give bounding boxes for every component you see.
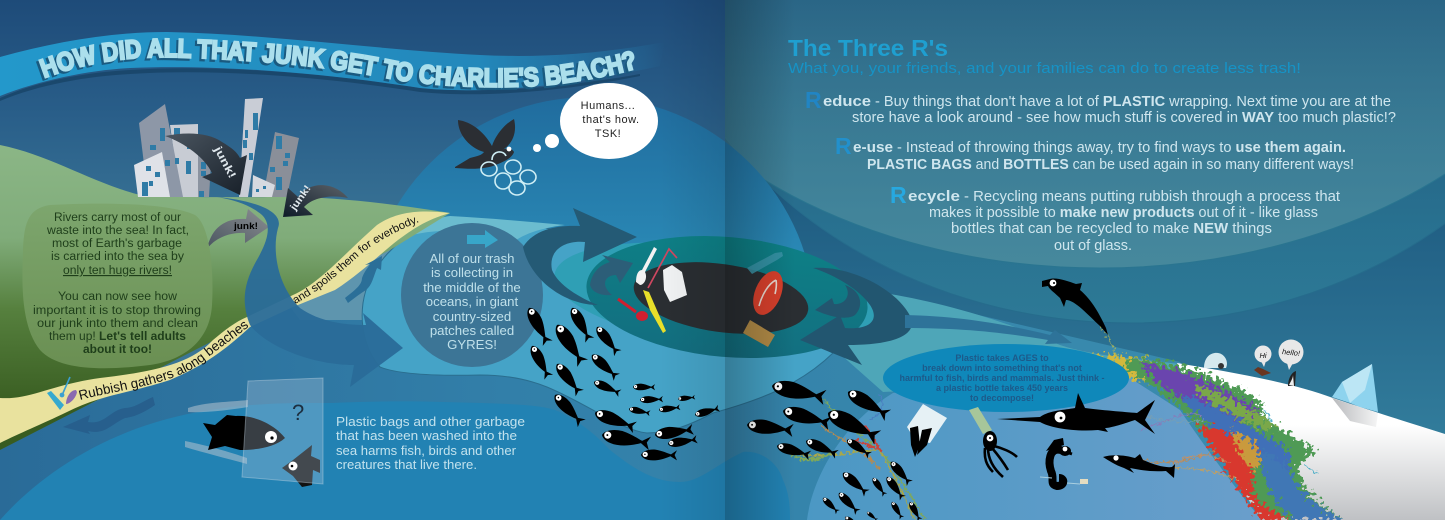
strands of net around the animals (1100, 325, 1318, 480)
text block: recycle: bottles that can be recycled to make NEW things (951, 221, 1272, 237)
trash: fork (636, 247, 657, 285)
title: HOW DID ALL THAT JUNK GET TO CHARLIE'S BEACH? (38, 38, 634, 88)
green hill (0, 145, 450, 450)
background: deep blue lagoon (0, 401, 790, 520)
trash: plastic jug (663, 265, 687, 302)
fish tangled in nets (746, 378, 925, 520)
text panel: rivers: only ten huge rivers! (63, 265, 172, 277)
background: grey-blue shallows under the beach (285, 232, 400, 320)
background: lower sea (0, 218, 1262, 520)
arrow: gyre inner left (590, 255, 633, 295)
text: plastic bags: sea harms fish, birds and other (336, 443, 517, 458)
text block: reduce: R (805, 87, 822, 113)
arrow: junk into the river: junk! (288, 183, 314, 214)
text panel: plastic takes ages: harmful to fish, birds and mammals. Just think - (899, 373, 1105, 383)
icon: rubbish on the beach (47, 377, 77, 410)
text panel: gyres: All of our trash (429, 251, 515, 266)
background: left page (0, 0, 725, 520)
text: plastic bags (336, 414, 525, 472)
squid in a cup (969, 407, 1017, 477)
text block: re-use (835, 133, 1354, 173)
background: teal current to the right of the gyre (830, 290, 1185, 392)
text panel: rivers: waste into the sea! In fact, (46, 225, 189, 237)
trash: bottle (747, 252, 783, 274)
text: plastic bags: creatures that live there. (336, 457, 477, 472)
text panel: plastic takes ages: to decompose! (970, 393, 1034, 403)
text panel: gyres: the middle of the (423, 280, 521, 295)
river and big current arrow (217, 197, 403, 387)
text block: recycle: out of glass. (1054, 238, 1132, 254)
text block: re-use: - Instead of throwing things away, try to find ways to use them again. (897, 140, 1346, 156)
trash: straw (648, 249, 677, 288)
arrow: junk from the land (207, 209, 269, 249)
text panel: rivers: is carried into the sea by (51, 251, 184, 263)
text: plastic bags: that has been washed into the (336, 428, 517, 443)
text panel: gyres: patches called (430, 323, 514, 338)
text panel: gyres (401, 223, 543, 367)
iceberg (1332, 364, 1378, 427)
text block: recycle (890, 182, 1340, 254)
text panel: rivers: Rivers carry most of our (54, 212, 181, 224)
text panel: plastic takes ages: break down into something that's not (922, 363, 1082, 373)
speech bubble: hi: Hi (1259, 351, 1267, 360)
bird tangled in rings (455, 119, 536, 195)
text panel: gyres: country-sized (433, 309, 511, 324)
text panel: rivers (22, 204, 212, 368)
text block: re-use: e-use (853, 139, 893, 156)
arrow: current to the arctic (905, 315, 1072, 344)
text panel: plastic takes ages: Plastic takes AGES to (955, 353, 1049, 363)
background: right page (725, 0, 1445, 520)
sandy beach (0, 212, 450, 443)
arrow: junk from the city (165, 134, 247, 195)
text block: re-use: PLASTIC BAGS and BOTTLES can be used again in so many different ways! (867, 157, 1354, 173)
text panel: gyres: is collecting in (431, 265, 513, 280)
arrow: junk from the land: junk! (233, 221, 258, 231)
background: large teal arcs behind the three R's (725, 0, 1445, 322)
title: HOW DID ALL THAT JUNK GET TO CHARLIE'S BEACH? (36, 40, 632, 90)
trash: flip flop (747, 267, 789, 319)
text block: reduce: store have a look around - see how much stuff is covered in WAY too much plastic!? (852, 110, 1396, 126)
text panel: plastic takes ages (883, 344, 1129, 412)
text block: recycle: - Recycling means putting rubbish through a process that (964, 189, 1340, 205)
text panel: rivers: most of Earth's garbage (52, 238, 182, 250)
text panel: rivers: important it is to stop throwing (33, 305, 201, 317)
buildings (134, 98, 299, 197)
text panel: plastic takes ages: a plastic bottle takes 450 years (936, 383, 1068, 393)
text block: reduce: - Buy things that don't have a lot of PLASTIC wrapping. Next time you are at the (875, 94, 1391, 110)
trash: spoon (618, 299, 648, 321)
arrow: junk into the river (283, 183, 348, 217)
beach label: spoils them: and spoils them for everbody. (294, 217, 418, 304)
trash: knife (643, 290, 666, 333)
dolphin (1042, 278, 1108, 335)
text block: re-use: R (835, 133, 852, 159)
text panel: rivers: You can now see how (58, 291, 178, 303)
text block: recycle: makes it possible to make new products out of it - like glass (929, 205, 1318, 221)
background: sea dome behind the bird (365, 97, 815, 520)
garbage gyre (523, 208, 912, 369)
text block: reduce: educe (823, 93, 871, 110)
swordfish (997, 393, 1155, 434)
beach label: rubbish gathers: Rubbish gathers along beaches (78, 322, 248, 400)
arrow: gyre top current (523, 208, 637, 305)
background: light blue stream into the gyre (390, 216, 565, 245)
text block: reduce (805, 87, 1396, 126)
coloured plastic net (1073, 356, 1343, 520)
thought bubble: Humans... (581, 100, 635, 112)
arrow: wavy up (345, 256, 382, 303)
small bird on the ice (1254, 367, 1271, 376)
arrow: junk from the city: junk! (211, 144, 238, 180)
text panel: gyres: oceans, in giant (426, 294, 519, 309)
speech bubble: hello: hello! (1282, 347, 1301, 358)
subheading: What you, your friends, and your families can do to create less trash! (788, 60, 1301, 77)
arrow: gyre bottom current (800, 268, 912, 365)
speech bubble: hello (1278, 340, 1304, 370)
shark (1103, 454, 1175, 478)
igloo (1204, 353, 1227, 369)
arrow: gyre inner right (815, 285, 860, 318)
title ribbon (0, 32, 665, 101)
text block: recycle: ecycle (908, 188, 960, 205)
fish caught in a white plastic bag (907, 404, 947, 457)
text panel: rivers: our junk into them and clean (37, 318, 198, 330)
text: plastic bags: Plastic bags and other garbage (336, 414, 525, 429)
text panel: rivers: about it too! (83, 344, 152, 356)
text panel: gyres: GYRES! (447, 337, 497, 352)
text panel: rivers: them up! Let's tell adults (49, 331, 186, 343)
thought bubble: that's how. (582, 114, 640, 126)
text block: recycle: R (890, 182, 907, 208)
heading: the three R's: The Three R's (788, 35, 948, 61)
white ice shelf (1177, 363, 1445, 520)
thought bubble (533, 83, 658, 159)
speech bubble: hi (1254, 346, 1272, 367)
trash: cup (743, 320, 775, 347)
illustration: fish in plastic bag (185, 378, 323, 487)
background: pale blue lobe lower right (807, 378, 1262, 520)
thought bubble: TSK! (595, 128, 621, 140)
school of fish (524, 305, 720, 460)
background: light gyre lobe (362, 218, 833, 433)
seahorse (1040, 438, 1088, 486)
spine shadow (660, 0, 795, 520)
penguin (1288, 371, 1296, 386)
illustration: fish in plastic bag: ? (292, 400, 304, 425)
arrow: wavy left (63, 397, 155, 434)
